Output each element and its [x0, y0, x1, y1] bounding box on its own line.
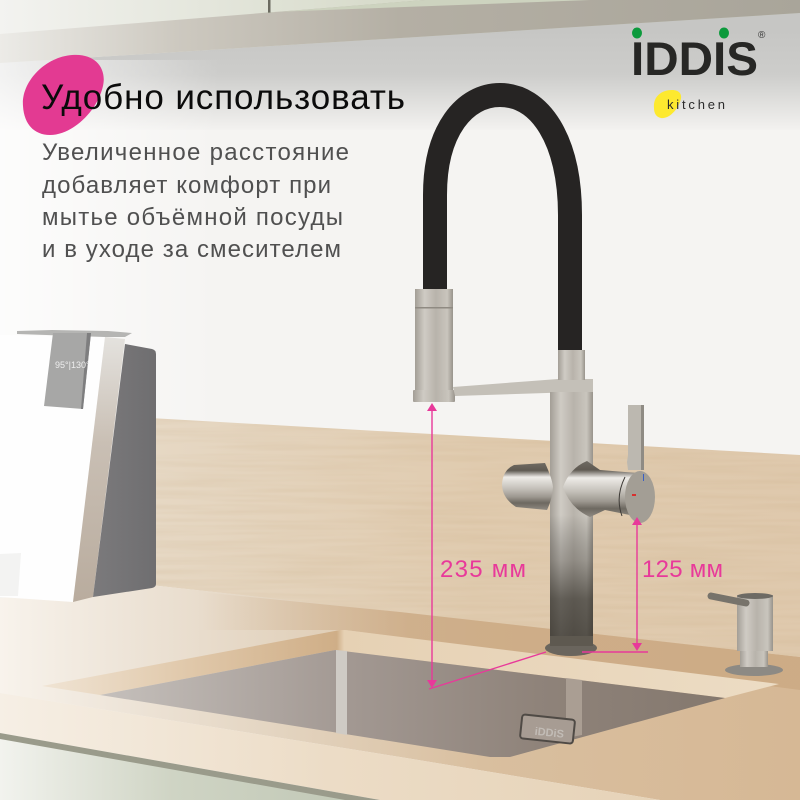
appliance dark side [93, 344, 156, 597]
dispenser neck [740, 650, 768, 667]
counter front edge [0, 693, 660, 800]
body text: мытье объёмной посуды [42, 204, 343, 231]
registered mark: ® [758, 30, 766, 41]
appliance beige edge [73, 337, 125, 602]
overflow badge [520, 714, 575, 744]
sage cabinet front [0, 733, 380, 800]
counter shadow strip [200, 592, 800, 690]
sink wood edge [42, 630, 779, 698]
sink steel basin [100, 650, 725, 757]
body text [42, 139, 349, 263]
faucet base ring [545, 636, 597, 656]
diagonal reference line [429, 652, 546, 689]
dispenser pump [711, 596, 746, 603]
handle end cap [619, 471, 655, 523]
faucet collar [558, 350, 585, 380]
upper cabinet [0, 0, 800, 63]
faucet body dark lower reflection [550, 515, 593, 644]
horizontal reference line [582, 651, 648, 653]
faucet body [550, 392, 593, 644]
logo [631, 28, 766, 118]
soap dispenser [711, 593, 783, 676]
label 235: 235 мм [440, 556, 526, 583]
faucet reflection [566, 678, 582, 738]
overflow badge: iDDiS [534, 726, 564, 741]
vertical arrow [431, 410, 433, 684]
dispenser body [737, 595, 773, 651]
kitchen label: kitchen [667, 97, 725, 112]
spray head [413, 289, 455, 402]
body text: и в уходе за смесителем [42, 236, 341, 263]
title: Удобно использовать [41, 78, 405, 117]
wordmark: IDDIS [631, 32, 758, 85]
horizontal arm [453, 379, 593, 396]
dimension 235 mm [427, 403, 546, 689]
display panel: 95°|130° [55, 360, 90, 370]
lever handle [627, 405, 644, 470]
appliance white body [0, 335, 105, 602]
yellow blob [654, 90, 681, 118]
label 125: 125 мм [642, 556, 723, 583]
vertical arrow [636, 525, 638, 646]
sink cutout [42, 630, 779, 757]
appliance top plate [17, 330, 132, 337]
appliance lower base [0, 553, 21, 596]
water heater appliance [0, 330, 156, 602]
dimension 125 mm [582, 517, 723, 652]
body text: добавляет комфорт при [42, 172, 331, 199]
display panel [44, 333, 91, 409]
body text: Увеличенное расстояние [42, 139, 349, 166]
countertop [0, 585, 800, 800]
green dots [632, 28, 642, 38]
right handle knob [563, 461, 640, 517]
title blob [23, 55, 104, 135]
flexible black hose [435, 95, 570, 352]
ceiling cabinet band [0, 0, 800, 63]
dispenser base [725, 664, 783, 676]
sink corner highlight [336, 650, 347, 735]
faucet [413, 95, 655, 656]
wood backsplash [150, 418, 800, 658]
left wall fade [0, 60, 220, 590]
left handle knob [502, 463, 553, 510]
wall shadow below cabinet [0, 10, 800, 130]
